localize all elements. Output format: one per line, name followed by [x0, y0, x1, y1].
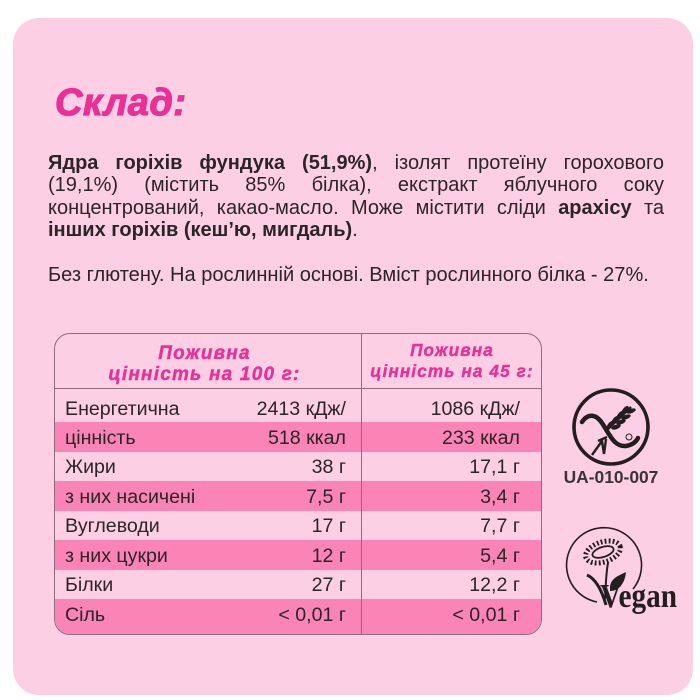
row: sugars: 5,4 г [480, 545, 520, 567]
row: energy: Енергетична [65, 398, 180, 420]
icon: gluten free [564, 388, 658, 487]
table header: per 45 g: цінність на 45 г: [370, 361, 534, 381]
row: salt [65, 604, 520, 626]
row: salt: < 0,01 г [278, 604, 346, 626]
row: fat: Жири [65, 456, 116, 478]
row: protein [65, 574, 520, 596]
row: protein: 12,2 г [469, 574, 520, 596]
text block: composition [48, 152, 664, 241]
row: energy value: цінність [65, 427, 136, 449]
row: saturated: 7,5 г [306, 486, 346, 508]
row: protein: Білки [65, 574, 113, 596]
table header: per 45 g [370, 340, 534, 381]
icon: vegan sunflower [566, 526, 677, 615]
table header: per 100 g: Поживна [158, 343, 251, 364]
row: energy value: 518 ккал [268, 427, 346, 449]
row: energy [65, 398, 520, 420]
text block: composition: (19,1%) (містить 85% білка), екстракт яблучного соку [48, 174, 664, 196]
heading: Склад: Склад: [55, 82, 187, 124]
row: energy: 2413 кДж/ [257, 398, 346, 420]
row: salt: < 0,01 г [452, 604, 520, 626]
row: fat [65, 456, 520, 478]
row: saturated: 3,4 г [480, 486, 520, 508]
row: saturated [65, 486, 520, 508]
text block: composition: інших горіхів (кеш’ю, мигдаль). [48, 219, 358, 241]
text block: composition: концентрований, какао-масло. Може містити сліди арахісу та [48, 197, 664, 219]
label: certificate number: UA-010-007 [564, 467, 658, 487]
table header: per 100 g: цінність на 100 г: [108, 364, 301, 385]
row: sugars [65, 545, 520, 567]
row: energy: 1086 кДж/ [431, 398, 520, 420]
panel: nutrition table [54, 333, 542, 635]
row: sugars: 12 г [312, 545, 346, 567]
row: fat: 38 г [312, 456, 346, 478]
row: carbohydrates: 7,7 г [480, 515, 520, 537]
table header: per 100 g [108, 343, 301, 385]
row: energy value: 233 ккал [442, 427, 520, 449]
row: sugars: з них цукри [65, 545, 168, 567]
row: saturated: з них насичені [65, 486, 195, 508]
row: energy value [65, 427, 520, 449]
text block: dietary note: Без глютену. На рослинній основі. Вміст рослинного білка - 27%. [48, 264, 649, 286]
row: carbohydrates [65, 515, 520, 537]
row: protein: 27 г [312, 574, 346, 596]
table header: per 45 g: Поживна [410, 340, 494, 360]
row: fat: 17,1 г [469, 456, 520, 478]
row: carbohydrates: Вуглеводи [65, 515, 160, 537]
text block: composition: Ядра горіхів фундука (51,9%), ізолят протеїну горохового [48, 152, 664, 174]
row: carbohydrates: 17 г [312, 515, 346, 537]
row: salt: Сіль [65, 604, 105, 626]
